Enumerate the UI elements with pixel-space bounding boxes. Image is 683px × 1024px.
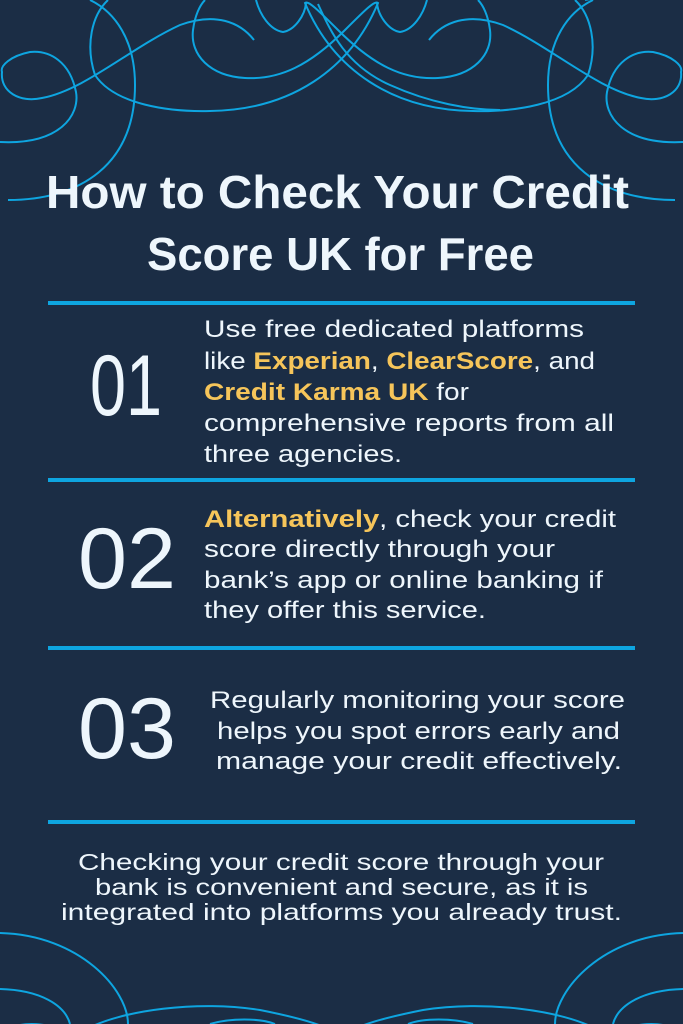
footer note: Checking your credit score through your: [78, 849, 604, 875]
text block 03: helps you spot errors early and: [217, 718, 620, 745]
text block 02: [204, 506, 616, 624]
text block 03: manage your credit effectively.: [216, 748, 622, 775]
text block 01: Use free dedicated platforms: [204, 316, 584, 343]
text block 02: Alternatively , check your credit: [204, 506, 616, 533]
decoration: top swirls: [0, 0, 683, 200]
title: Score UK for Free: [147, 228, 534, 280]
footer note: [61, 849, 622, 925]
text block 02: they offer this service.: [204, 597, 486, 624]
step 02: [78, 506, 616, 624]
number 03: 03: [78, 681, 176, 777]
number 01: 01: [90, 338, 162, 434]
footer note: integrated into platforms you already trust.: [61, 899, 622, 925]
number 02: 02: [78, 511, 176, 607]
text block 01: comprehensive reports from all: [204, 410, 614, 437]
text block 02: bank’s app or online banking if: [204, 567, 603, 594]
text block 01: Credit Karma UK for: [204, 379, 469, 406]
text block 03: [210, 687, 625, 775]
text block 01: three agencies.: [204, 441, 402, 468]
step 03: [78, 681, 625, 777]
footer note: bank is convenient and secure, as it is: [95, 874, 588, 900]
title: How to Check Your Credit: [46, 166, 629, 218]
decoration: bottom swirls: [0, 933, 683, 1024]
dividers: [48, 301, 635, 824]
title: [46, 166, 629, 280]
text block 01: like Experian , ClearScore , and: [204, 348, 595, 375]
text block 03: Regularly monitoring your score: [210, 687, 625, 714]
step 01: [90, 316, 614, 468]
text block 01: [204, 316, 614, 468]
text block 02: score directly through your: [204, 536, 555, 563]
